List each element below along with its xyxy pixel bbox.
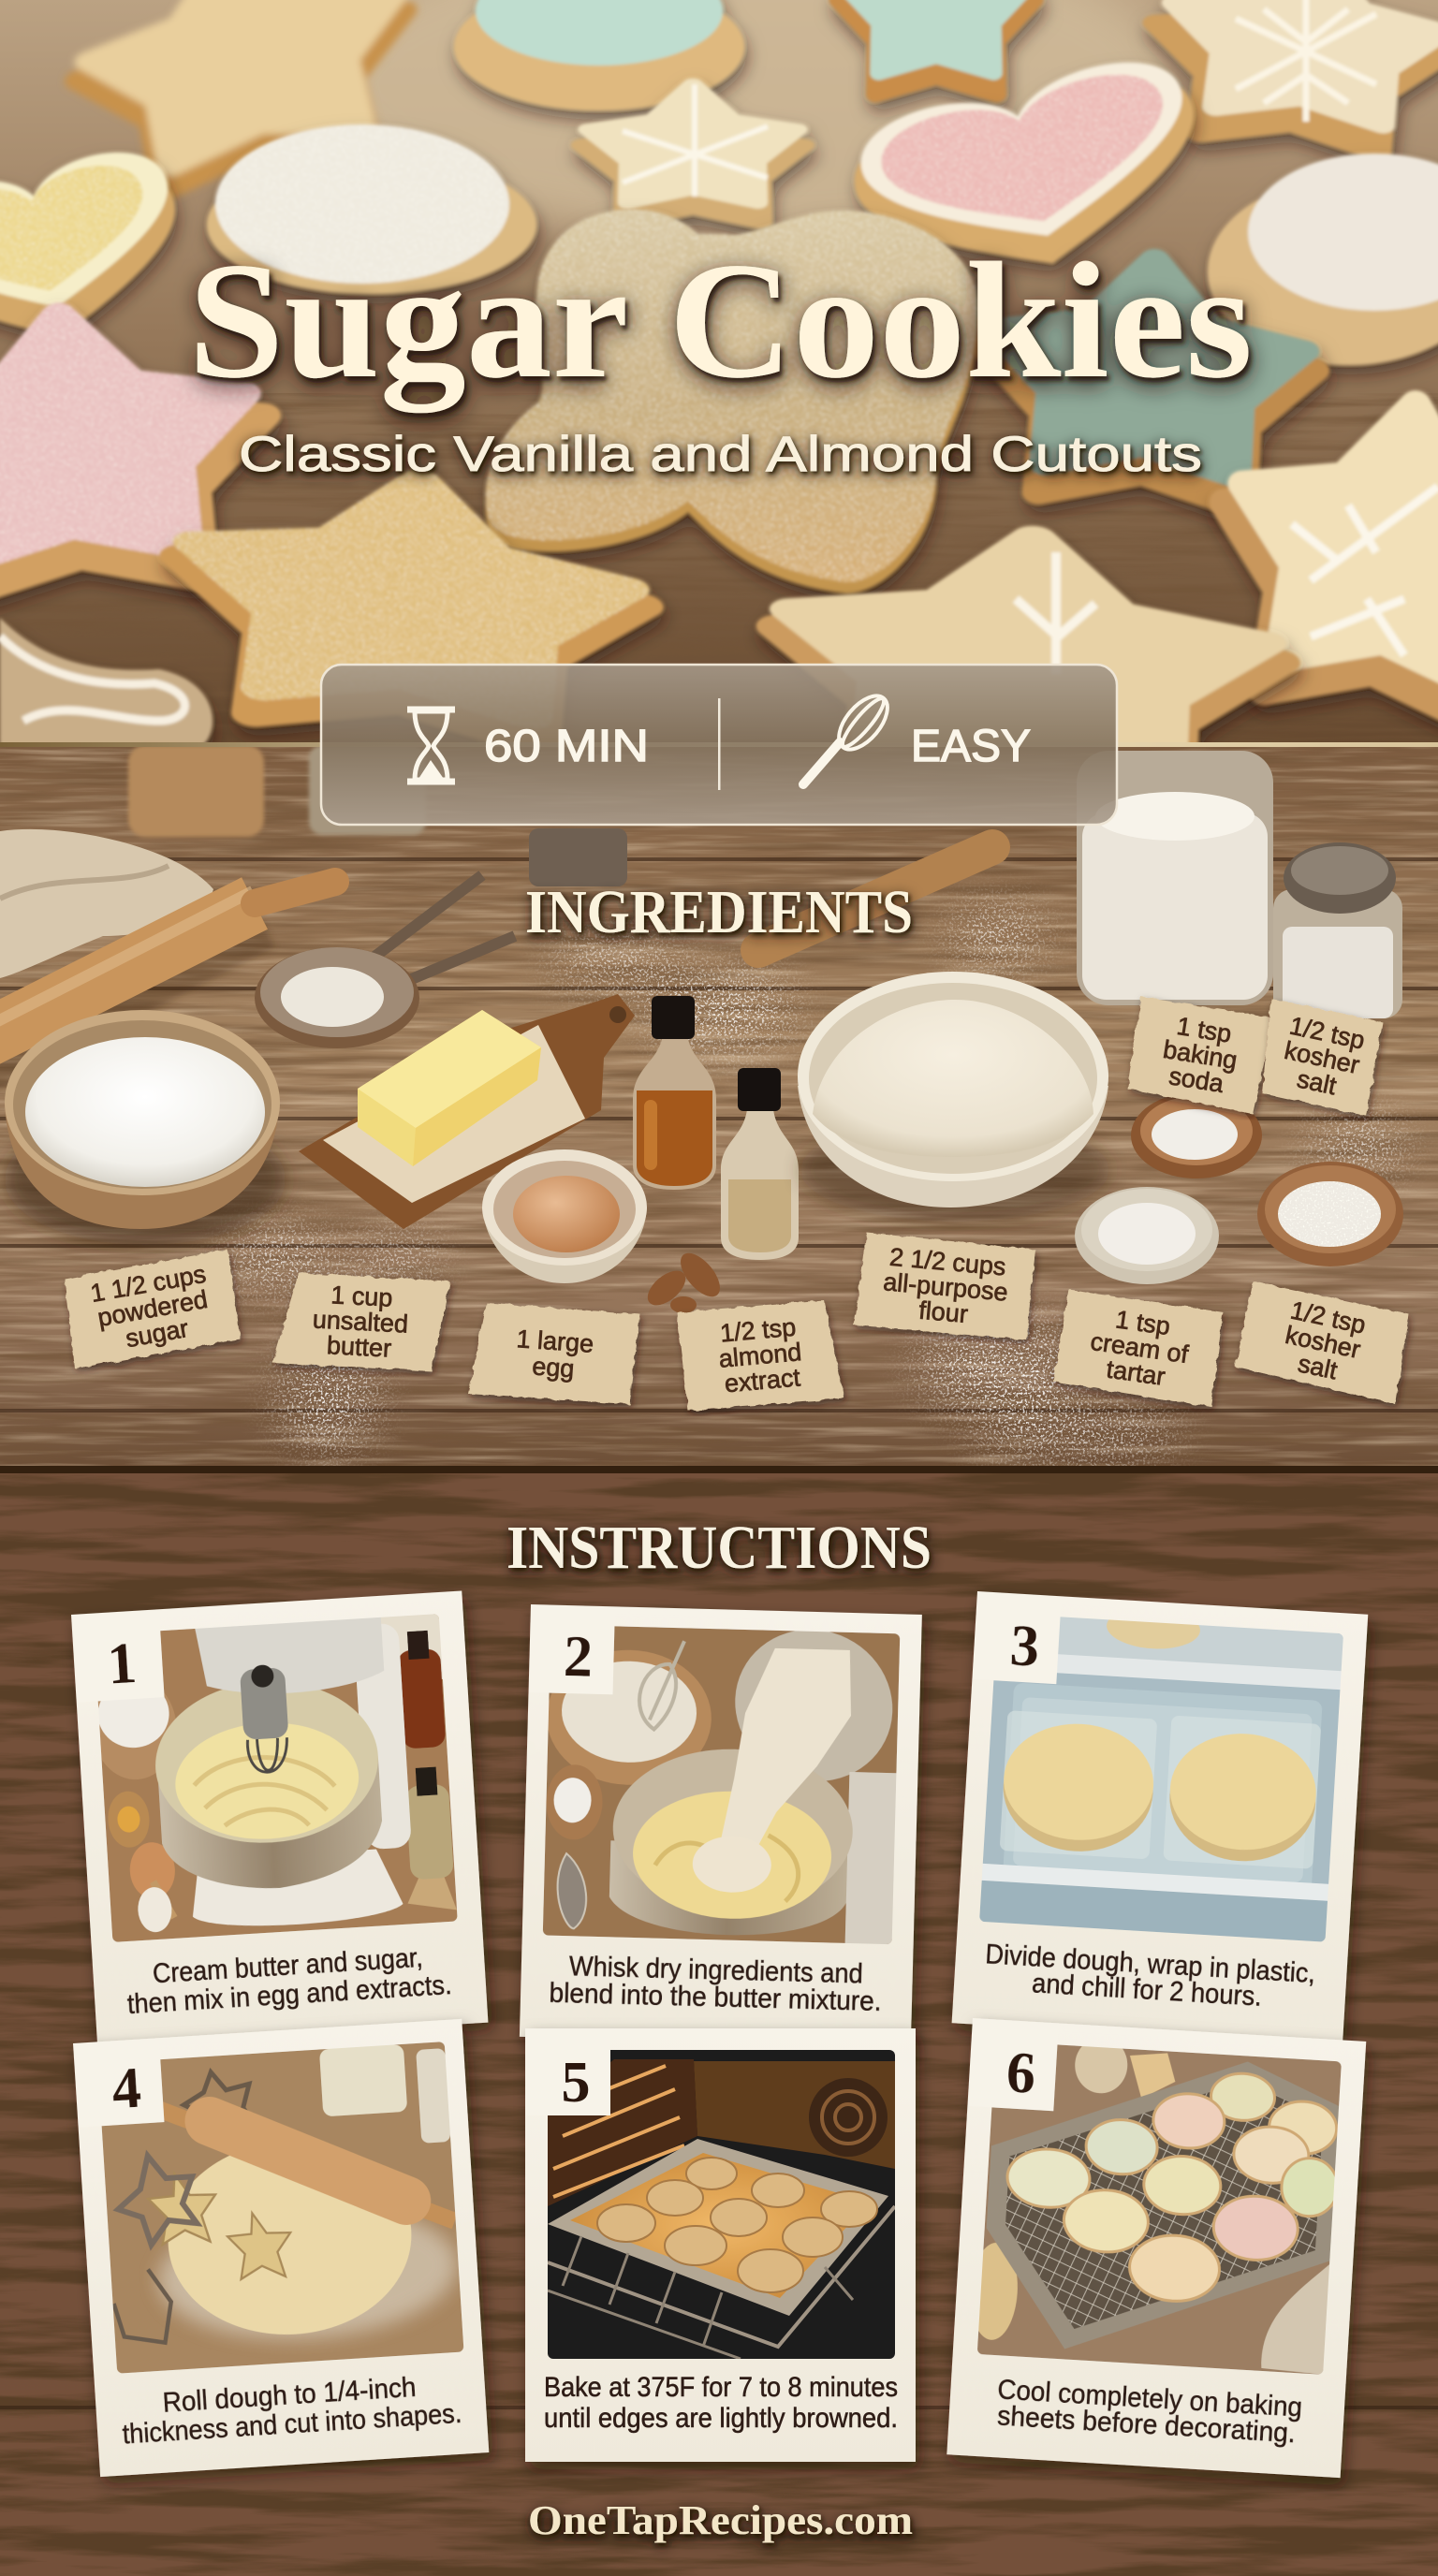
cookie: large plain centre [486, 210, 978, 593]
caption: blend into the butter mixture. [549, 1978, 882, 2017]
prop: rolling pin left [0, 882, 335, 1067]
baked cookies [597, 2158, 877, 2292]
caption: then mix in egg and extracts. [126, 1969, 452, 2020]
step number 3: 3 [1008, 1614, 1041, 1679]
label: 1 1/2 cups powdered sugar: 1 1/2 cups [88, 1260, 208, 1308]
bowl: powdered sugar [5, 1010, 286, 1245]
label: 1 cup unsalted butter: 1 cup [330, 1281, 393, 1312]
label: 2 1/2 cups all-purpose flour: 2 1/2 cups [888, 1243, 1007, 1281]
caption [125, 1940, 452, 2020]
label: 1 tsp baking soda [1127, 997, 1274, 1114]
cookie: bottom star [769, 521, 1284, 819]
butter block [358, 1010, 541, 1166]
label: 1 1/2 cups powdered sugar: sugar [124, 1314, 191, 1353]
bowl: spoon with flour [255, 947, 419, 1048]
panel: hero with cookies on wood [0, 0, 1438, 819]
caption: Bake at 375F for 7 to 8 minutes [544, 2372, 898, 2403]
cookie: top-right snowflake star [1145, 0, 1438, 158]
label: 1/2 tsp almond extract: 1/2 tsp [719, 1313, 797, 1348]
footer: website: OneTapRecipes.com [528, 2497, 913, 2543]
bottle: almond extract [721, 1068, 799, 1260]
bowl: kosher salt [1257, 1162, 1403, 1266]
label: 1/2 tsp kosher salt upper: kosher [1282, 1036, 1362, 1079]
prop: glass [309, 745, 426, 835]
label: 1/2 tsp kosher salt lower [1235, 1281, 1409, 1404]
caption: sheets before decorating. [996, 2400, 1297, 2449]
heading: ingredients: INGREDIENTS [525, 878, 913, 946]
label: 1/2 tsp kosher salt lower: kosher [1283, 1321, 1363, 1364]
panel: instructions wood [0, 1466, 1438, 2576]
cookie: yellow heart [0, 141, 197, 365]
label: 1 tsp cream of tartar: cream of [1089, 1327, 1191, 1368]
caption [544, 2372, 898, 2434]
caption: until edges are lightly browned. [544, 2403, 898, 2434]
label: 1 tsp cream of tartar [1053, 1290, 1224, 1407]
step number 5: 5 [562, 2051, 590, 2115]
cookie: bottom-left heart [0, 618, 213, 749]
step number 2: 2 [563, 1625, 594, 1690]
text: 60 MIN: 60 MIN [484, 722, 649, 771]
label: 1 cup unsalted butter [272, 1273, 449, 1371]
bowl: baking soda [1131, 1092, 1262, 1178]
label: 2 1/2 cups all-purpose flour: all-purpose [882, 1267, 1009, 1307]
label: 1 large egg: 1 large [516, 1325, 594, 1358]
prop: second rolling pin [758, 847, 992, 950]
label: 1 cup unsalted butter: butter [326, 1331, 392, 1363]
label: 1/2 tsp almond extract: extract [724, 1363, 802, 1398]
label: 1 tsp baking soda: 1 tsp [1175, 1012, 1233, 1048]
panel: ingredients wood table [0, 745, 1438, 1470]
bowl: cream of tartar [1075, 1187, 1219, 1284]
card: step 6 [946, 2018, 1366, 2478]
step number 1: 1 [106, 1632, 139, 1697]
step number 4: 4 [110, 2056, 143, 2121]
caption: Cool completely on baking [997, 2374, 1303, 2423]
gold divider line and stats banner [0, 665, 1438, 825]
cookie: right round [1208, 154, 1438, 365]
photo: rolling dough [97, 2042, 464, 2374]
caption: thickness and cut into shapes. [122, 2398, 462, 2450]
photo: stand mixer [85, 1597, 458, 1942]
cookie: pink heart [844, 48, 1221, 305]
card: step 3 [952, 1591, 1368, 2046]
card: step 1 [71, 1590, 488, 2046]
label: 1 large egg: egg [531, 1352, 575, 1383]
text: EASY: EASY [911, 722, 1031, 771]
card: step 4 [73, 2019, 489, 2477]
prop: wooden cylinder [128, 745, 264, 837]
label: 1 cup unsalted butter: unsalted [312, 1305, 409, 1339]
label: 1 1/2 cups powdered sugar: powdered [95, 1285, 210, 1332]
cookie: mint round [454, 0, 744, 110]
label: 1 tsp baking soda: baking [1161, 1035, 1240, 1075]
caption [549, 1951, 883, 2017]
label: 1/2 tsp kosher salt lower: 1/2 tsp [1288, 1295, 1368, 1339]
caption [983, 1939, 1316, 2015]
bowl: flour [798, 972, 1109, 1222]
bowl: egg [482, 1149, 647, 1283]
cookie: mint star right [976, 249, 1320, 511]
card: step 5 [525, 2028, 916, 2462]
caption: Whisk dry ingredients and [568, 1951, 863, 1989]
board with paper [299, 994, 635, 1229]
photo: dough in fridge [979, 1598, 1344, 1942]
title: Sugar Cookies [188, 227, 1253, 413]
cookie: small snowflake [581, 84, 804, 223]
label: 1/2 tsp kosher salt upper [1262, 999, 1383, 1116]
prop: cloth [0, 829, 213, 978]
label: 1 1/2 cups powdered sugar [65, 1250, 241, 1368]
label: 1/2 tsp almond extract [677, 1300, 844, 1411]
photo: oven [548, 2050, 895, 2359]
card: step 2 [520, 1597, 922, 2047]
cooled cookies [1001, 2060, 1344, 2310]
label: 1 tsp cream of tartar: 1 tsp [1114, 1305, 1172, 1340]
caption: Divide dough, wrap in plastic, [985, 1939, 1316, 1989]
step number 6: 6 [1005, 2041, 1037, 2106]
cookie: right snowflake star [1200, 382, 1438, 728]
prop: measuring spoons [328, 828, 627, 1006]
label: 1/2 tsp almond extract: almond [718, 1338, 802, 1373]
label: 1 tsp baking soda: soda [1167, 1061, 1226, 1098]
photo: flour into bowl [543, 1626, 901, 1945]
caption: Cream butter and sugar, [152, 1942, 424, 1989]
almonds [641, 1247, 727, 1313]
cookie: pink star [0, 302, 273, 599]
salt shaker [1273, 842, 1402, 1018]
caption [120, 2369, 462, 2450]
cookie: white round [207, 124, 536, 294]
caption: Roll dough to 1/4-inch [162, 2372, 417, 2419]
label: 1/2 tsp kosher salt upper: 1/2 tsp [1287, 1011, 1367, 1055]
photo: cooling rack [967, 2030, 1346, 2375]
label: 1 large egg [468, 1303, 640, 1404]
icon: whisk [803, 687, 897, 784]
label: 1/2 tsp kosher salt upper: salt [1295, 1064, 1340, 1101]
label: 2 1/2 cups all-purpose flour [854, 1233, 1035, 1339]
flour dust on table [225, 910, 1404, 1456]
label: 1 tsp cream of tartar: tartar [1105, 1354, 1167, 1391]
bottle: vanilla [633, 996, 716, 1190]
cookie: gold star [166, 458, 651, 754]
cookie: top-left star [64, 0, 428, 203]
caption: and chill for 2 hours. [1031, 1968, 1263, 2012]
icon: hourglass [407, 710, 455, 782]
subtitle: Classic Vanilla and Almond Cutouts [239, 427, 1202, 482]
caption [995, 2374, 1303, 2450]
heading: instructions: INSTRUCTIONS [506, 1514, 932, 1582]
cookie: mint star top [839, 0, 1034, 95]
label: 1/2 tsp kosher salt lower: salt [1296, 1349, 1341, 1385]
jar of flour [1077, 751, 1273, 1005]
label: 2 1/2 cups all-purpose flour: flour [917, 1296, 969, 1328]
